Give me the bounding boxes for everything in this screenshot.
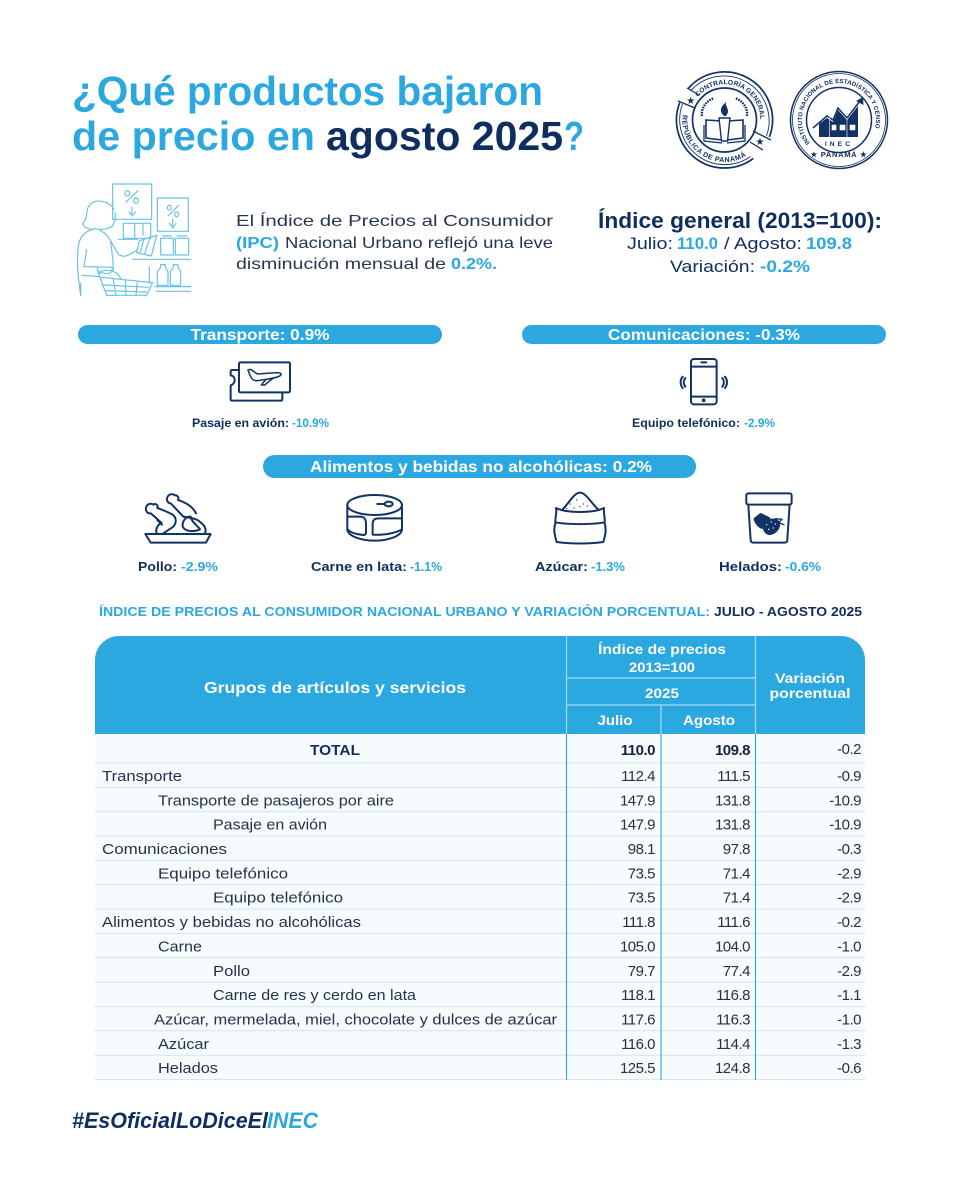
row: Comunicaciones: Comunicaciones <box>102 841 227 858</box>
general index summary: 110.0 <box>677 235 718 253</box>
row: Azúcar <box>158 1036 861 1053</box>
row: Transporte: Transporte <box>102 768 182 785</box>
row: Pollo: Pollo <box>213 963 250 980</box>
general index summary <box>598 208 882 276</box>
row: Comunicaciones: -0.3 <box>837 841 861 858</box>
label: Azúcar: Azúcar: <box>535 559 588 574</box>
icon: sugar sack <box>554 493 606 543</box>
row: TOTAL: -0.2 <box>837 741 861 758</box>
label: Pasaje en avión <box>192 418 329 430</box>
row: Carne de res y cerdo en lata: 116.8 <box>716 987 750 1004</box>
label: Azúcar <box>535 559 625 574</box>
general index summary: Variación: <box>670 258 755 276</box>
row: Transporte <box>102 768 861 785</box>
row: Pasaje en avión: 147.9 <box>620 817 655 834</box>
logo: INEC: INSTITUTO NACIONAL DE ESTADÍSTICA Y CENSO <box>798 78 880 146</box>
row: Transporte de pasajeros por aire: Transporte de pasajeros por aire <box>158 792 394 809</box>
general index summary: Julio: <box>627 235 673 253</box>
logo: INEC <box>790 70 888 170</box>
logo: Contraloría General <box>676 71 774 169</box>
column lines <box>566 734 756 1080</box>
row: TOTAL <box>310 741 861 759</box>
row: Carne: 105.0 <box>620 938 655 955</box>
pill: Comunicaciones <box>522 325 886 344</box>
pill: Transporte: Transporte: 0.9% <box>190 327 330 344</box>
row: Comunicaciones: 98.1 <box>628 841 655 858</box>
row: TOTAL: 109.8 <box>715 742 750 759</box>
table header: Julio <box>598 712 632 728</box>
row: Azúcar, mermelada, miel, chocolate y dulces de azúcar: 116.3 <box>716 1012 750 1028</box>
label: Pollo <box>138 559 218 574</box>
row: Helados: -0.6 <box>837 1060 861 1077</box>
row: Transporte de pasajeros por aire: 131.8 <box>715 792 750 809</box>
row: Transporte: -0.9 <box>837 768 861 785</box>
row: Azúcar: 114.4 <box>716 1036 750 1053</box>
row: Alimentos y bebidas no alcohólicas: Alimentos y bebidas no alcohólicas <box>102 914 361 931</box>
row: Carne: -1.0 <box>837 938 861 955</box>
row: Carne de res y cerdo en lata: Carne de res y cerdo en lata <box>213 987 417 1004</box>
row: Helados: 124.8 <box>715 1060 750 1077</box>
icon: canned meat <box>347 495 402 541</box>
hashtag: INEC <box>267 1108 319 1133</box>
row: Pasaje en avión <box>213 817 861 834</box>
row: Pasaje en avión: Pasaje en avión <box>213 817 327 834</box>
row: Carne: Carne <box>158 938 202 955</box>
logo: INEC: INEC <box>825 141 853 148</box>
row: Carne de res y cerdo en lata: 118.1 <box>621 987 655 1004</box>
title: de precio en <box>72 113 315 159</box>
label: Carne en lata: -1.1% <box>410 559 442 574</box>
logo: Contraloría General: ★ <box>756 137 765 148</box>
icon: roast chicken <box>145 494 211 543</box>
logo: Contraloría General: REPÚBLICA DE PANAMÁ <box>682 115 746 162</box>
title: agosto 2025 <box>326 113 563 159</box>
logo: Contraloría General: ★ <box>686 96 695 107</box>
table heading: JULIO - AGOSTO 2025 <box>714 605 862 619</box>
pill: Comunicaciones: Comunicaciones: -0.3% <box>608 327 800 344</box>
intro text: El Índice de Precios al Consumidor <box>236 211 554 230</box>
row: TOTAL: 110.0 <box>621 742 655 759</box>
icon: shopper with cart <box>77 184 191 296</box>
label: Helados: Helados: <box>719 559 782 574</box>
label: Helados: -0.6% <box>785 559 821 574</box>
label: Carne en lata <box>311 559 442 574</box>
row lines <box>95 763 865 1080</box>
row: Transporte: 112.4 <box>621 768 655 785</box>
row: Carne: 104.0 <box>715 938 750 955</box>
table header: 2013=100 <box>629 659 695 675</box>
table body background <box>95 734 865 1080</box>
pill: Alimentos y bebidas: Alimentos y bebidas no alcohólicas: 0.2% <box>310 459 652 476</box>
general index summary: / Agosto: <box>724 235 802 253</box>
row: Azúcar, mermelada, miel, chocolate y dulces de azúcar <box>154 1012 861 1028</box>
intro text <box>236 211 554 273</box>
row: Equipo telefónico item: 73.5 <box>628 890 655 907</box>
row: Pasaje en avión: -10.9 <box>829 817 861 834</box>
row: Equipo telefónico group: 71.4 <box>723 865 750 882</box>
row: Carne de res y cerdo en lata: -1.1 <box>837 987 861 1004</box>
intro text: (IPC) <box>236 235 279 252</box>
row: Azúcar: Azúcar <box>158 1036 209 1053</box>
title <box>72 68 584 159</box>
row: TOTAL: TOTAL <box>310 742 360 759</box>
intro text: 0.2%. <box>451 256 497 273</box>
row: Carne <box>158 938 861 955</box>
row: Comunicaciones <box>102 841 861 858</box>
table header: Grupos de artículos y servicios <box>204 680 466 697</box>
pill: Alimentos y bebidas <box>263 455 696 478</box>
table header: porcentual <box>770 685 850 701</box>
label: Azúcar: -1.3% <box>591 559 625 574</box>
table: price index <box>95 636 865 1080</box>
row: Helados <box>158 1060 861 1077</box>
row: Equipo telefónico group: 73.5 <box>628 865 655 882</box>
row: Azúcar: -1.3 <box>837 1036 861 1053</box>
row: Helados: 125.5 <box>620 1060 655 1077</box>
row: Azúcar, mermelada, miel, chocolate y dulces de azúcar: Azúcar, mermelada, miel, chocolate y dulces de azúcar <box>154 1012 557 1028</box>
row: Pollo: 79.7 <box>628 963 655 980</box>
label: Equipo telefónico: -2.9% <box>744 418 775 430</box>
row: Alimentos y bebidas no alcohólicas <box>102 914 861 931</box>
general index summary: -0.2% <box>760 258 810 276</box>
row: Transporte de pasajeros por aire <box>158 792 861 809</box>
table heading: ÍNDICE DE PRECIOS AL CONSUMIDOR NACIONAL URBANO Y VARIACIÓN PORCENTUAL: <box>99 604 710 619</box>
row: Alimentos y bebidas no alcohólicas: 111.6 <box>717 914 750 931</box>
label: Equipo telefónico: Equipo telefónico: <box>632 418 740 430</box>
label: Pasaje en avión: -10.9% <box>292 418 329 430</box>
title: ? <box>564 113 584 159</box>
table header: 2025 <box>645 685 679 701</box>
table header: Variación <box>775 670 845 686</box>
row: Equipo telefónico item: Equipo telefónico <box>213 890 343 907</box>
row: Azúcar, mermelada, miel, chocolate y dulces de azúcar: 117.6 <box>621 1012 655 1028</box>
label: Pollo: Pollo: <box>138 559 177 574</box>
row: Alimentos y bebidas no alcohólicas: -0.2 <box>837 914 861 931</box>
intro text: disminución mensual de <box>236 256 446 273</box>
intro text: Nacional Urbano reflejó una leve <box>285 235 553 252</box>
label: Pollo: -2.9% <box>181 559 218 574</box>
row: Pollo <box>213 963 861 980</box>
row: Azúcar, mermelada, miel, chocolate y dulces de azúcar: -1.0 <box>837 1012 861 1028</box>
row: Equipo telefónico group <box>158 865 861 882</box>
row: Helados: Helados <box>158 1060 218 1077</box>
icon: smartphone <box>681 359 727 404</box>
row: Transporte de pasajeros por aire: -10.9 <box>829 792 861 809</box>
icon: ice cream tub <box>746 493 792 543</box>
table header <box>95 636 865 734</box>
row: Equipo telefónico group: Equipo telefónico <box>158 865 288 882</box>
general index summary: Índice general (2013=100): <box>598 208 882 233</box>
row: Pasaje en avión: 131.8 <box>715 817 750 834</box>
row: Alimentos y bebidas no alcohólicas: 111.8 <box>622 914 655 931</box>
table header: Índice de precios <box>598 641 726 657</box>
table heading <box>99 604 862 619</box>
row: Pollo: -2.9 <box>837 963 861 980</box>
row: Transporte: 111.5 <box>717 768 750 785</box>
row: Carne de res y cerdo en lata <box>213 987 861 1004</box>
title: ¿Qué productos bajaron <box>72 68 543 114</box>
icon: plane ticket <box>231 362 290 401</box>
label: Carne en lata: Carne en lata: <box>311 559 407 574</box>
table header: Agosto <box>683 712 735 728</box>
label: Pasaje en avión: Pasaje en avión: <box>192 418 289 430</box>
row: Transporte de pasajeros por aire: 147.9 <box>620 792 655 809</box>
pill: Transporte <box>78 325 442 344</box>
row: Equipo telefónico item <box>213 890 861 907</box>
row: Pollo: 77.4 <box>723 963 750 980</box>
logo: Contraloría General: CONTRALORÍA GENERAL <box>696 80 765 120</box>
row: Comunicaciones: 97.8 <box>723 841 750 858</box>
row: Equipo telefónico item: -2.9 <box>837 890 861 907</box>
row: Azúcar: 116.0 <box>621 1036 655 1053</box>
row: Equipo telefónico group: -2.9 <box>837 865 861 882</box>
row: Equipo telefónico item: 71.4 <box>723 890 750 907</box>
hashtag: #EsOficialLoDiceEl <box>72 1108 269 1133</box>
logo: INEC: ★ PANAMÁ ★ <box>811 150 868 159</box>
general index summary: 109.8 <box>806 235 852 253</box>
label: Helados <box>719 559 821 574</box>
